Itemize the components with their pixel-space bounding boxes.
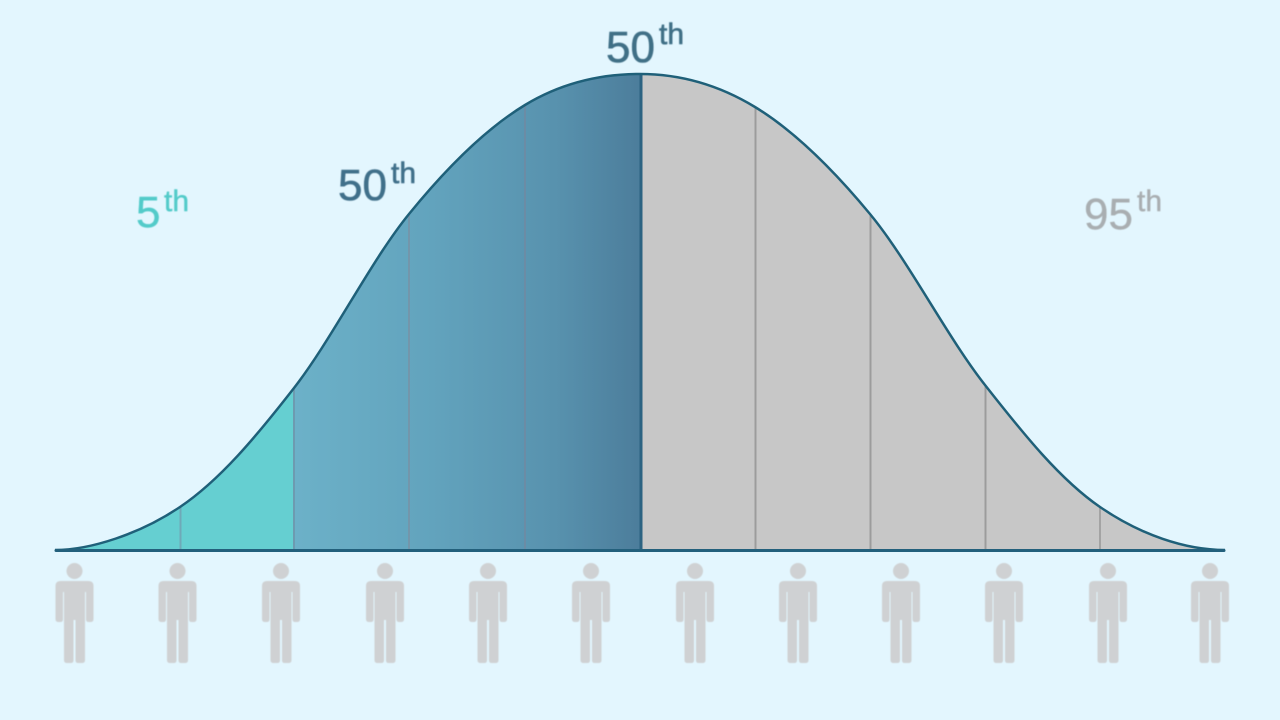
label: left 50th: 50	[338, 161, 387, 210]
label: left 50th: th	[391, 157, 416, 190]
label: top 50th: 50	[606, 23, 655, 72]
icon: person 8	[779, 563, 817, 663]
icon: person 12	[1191, 563, 1229, 663]
area: blue band up to 50th percentile	[294, 70, 641, 550]
label: 5th: 5	[136, 188, 160, 237]
area: grey upper half	[641, 70, 1225, 550]
icon: person 4	[366, 563, 404, 663]
icon: person 7	[676, 563, 714, 663]
label: top 50th: th	[659, 18, 684, 51]
icon: person 5	[469, 563, 507, 663]
baseline axis	[56, 549, 1224, 552]
median line	[640, 74, 642, 550]
icon: person 6	[572, 563, 610, 663]
icon: person 9	[882, 563, 920, 663]
label: 5th: th	[164, 185, 189, 218]
area: teal 5th percentile tail	[80, 392, 293, 549]
row of people icons	[56, 563, 1229, 663]
icon: person 3	[262, 563, 300, 663]
label: 95th: th	[1137, 185, 1162, 218]
curve outline	[55, 74, 1225, 550]
icon: person 2	[158, 563, 196, 663]
icon: person 1	[56, 563, 94, 663]
icon: person 11	[1089, 563, 1127, 663]
label: 95th: 95	[1084, 190, 1133, 239]
icon: person 10	[985, 563, 1023, 663]
bell curve chart	[55, 70, 1225, 550]
